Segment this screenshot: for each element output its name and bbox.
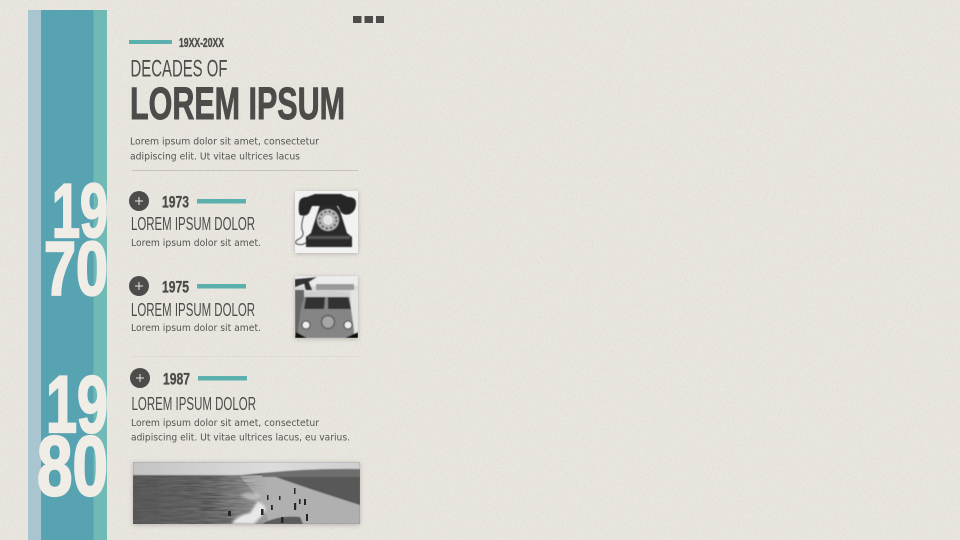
entry: 1975: Lorem ipsum dolor sit amet.	[131, 323, 261, 334]
intro text: adipiscing elit. Ut vitae ultrices lacus	[130, 152, 300, 162]
entry: 1973: 1973	[162, 194, 189, 212]
entry: 1975: LOREM IPSUM DOLOR	[131, 300, 255, 320]
entry: 1987	[130, 368, 350, 444]
decade label: 1970: 70	[44, 227, 108, 312]
entry: 1987: LOREM IPSUM DOLOR	[132, 394, 256, 414]
decade label: 1970: 19	[52, 169, 108, 254]
entry: 1973: LOREM IPSUM DOLOR	[131, 214, 255, 234]
title	[130, 56, 345, 129]
photo: camper van	[295, 276, 358, 338]
decade label: 1980: 19	[46, 360, 108, 450]
decade band	[28, 10, 107, 540]
decade label: 1980: 80	[37, 419, 108, 513]
entry: 1973: Lorem ipsum dolor sit amet.	[131, 238, 261, 249]
decade label: 1970	[44, 169, 108, 312]
intro text: Lorem ipsum dolor sit amet, consectetur	[130, 136, 320, 148]
entry: 1975: 1975	[162, 278, 189, 296]
date range heading	[129, 36, 224, 50]
title: DECADES OF	[130, 56, 228, 82]
entry: 1987: adipiscing elit. Ut vitae ultrices lacus, eu varius.	[131, 432, 350, 444]
date range heading: 19XX-20XX	[179, 36, 224, 50]
title: LOREM IPSUM	[130, 78, 345, 129]
photo: telephone	[295, 191, 358, 253]
top pagination squares	[353, 16, 384, 23]
intro text	[130, 136, 320, 162]
photo: beach	[133, 462, 360, 524]
entry: 1987: 1987	[163, 370, 190, 388]
entry: 1987: Lorem ipsum dolor sit amet, consectetur	[131, 418, 320, 429]
entry: 1975	[129, 276, 261, 334]
decade label: 1980	[37, 360, 108, 513]
entry: 1973	[129, 191, 261, 249]
